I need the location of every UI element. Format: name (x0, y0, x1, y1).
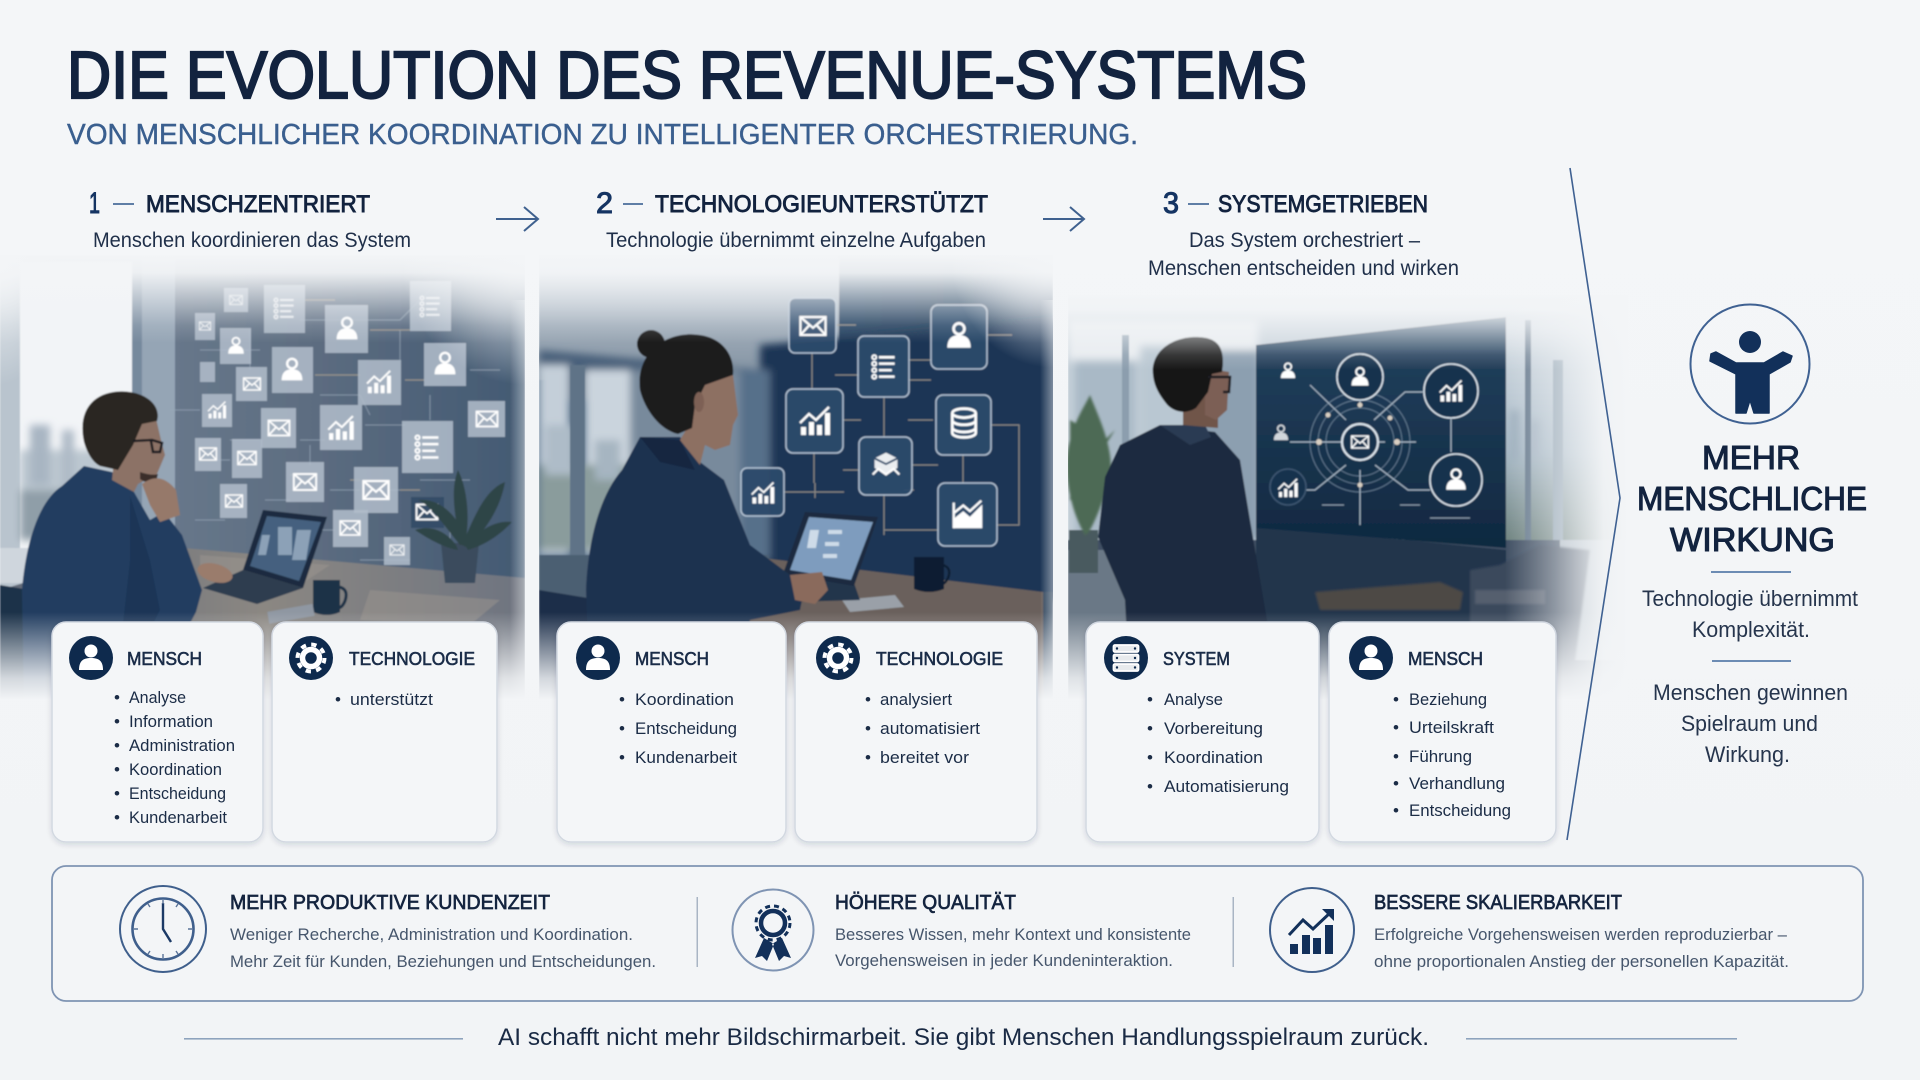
card: stage 2 Technologie: TECHNOLOGIE (876, 649, 1003, 669)
benefit: better scalability: Erfolgreiche Vorgehensweisen werden reproduzierbar – (1374, 925, 1788, 944)
card: stage 3 Mensch: Beziehung (1409, 690, 1487, 709)
panel: stage 1 heading: 1 (89, 187, 100, 220)
card: stage 1 Technologie: unterstützt (350, 690, 433, 709)
card: stage 1 Mensch: Kundenarbeit (129, 808, 227, 827)
card: stage 3 Mensch: • (1393, 718, 1399, 737)
benefit: productive customer time (120, 886, 656, 972)
panel: outcome: Komplexität. (1692, 617, 1810, 642)
panel: outcome: Wirkung. (1705, 742, 1790, 767)
card: stage 2 Technologie: automatisiert (880, 719, 980, 738)
card: stage 3 Mensch: Urteilskraft (1409, 718, 1494, 737)
card: stage 1 Mensch (52, 622, 263, 842)
photo: person coordinating floating task tiles (0, 272, 525, 694)
card: stage 3 System: • (1147, 690, 1153, 709)
benefit: higher quality (732, 890, 1191, 970)
card: stage 1 Mensch: Analyse (129, 688, 186, 707)
card: stage 1 Mensch: • (114, 688, 120, 707)
panel: stage 1 heading (89, 187, 411, 252)
plant (441, 543, 479, 583)
panel: stage 2 heading: Technologie übernimmt einzelne Aufgaben (606, 229, 986, 252)
card: stage 3 Mensch (1329, 622, 1556, 842)
laptop (203, 570, 303, 604)
card: stage 3 System: • (1147, 719, 1153, 738)
icon: clock (120, 886, 206, 972)
laptop (818, 580, 860, 602)
panel: stage 3 heading: Das System orchestriert – (1189, 229, 1420, 252)
card: stage 2 Mensch: Kundenarbeit (635, 748, 737, 767)
card: stage 3 System: Vorbereitung (1164, 719, 1263, 738)
photo: person looking at orchestration wall display (1068, 316, 1602, 694)
panel: stage 1 heading: Menschen koordinieren das System (93, 229, 411, 252)
card: stage 3 System: • (1147, 748, 1153, 767)
card: stage 2 Mensch: Koordination (635, 690, 734, 709)
card: stage 2 Technologie: • (865, 748, 871, 767)
panel: outcome: MEHR (1702, 439, 1800, 476)
panel: benefits (52, 866, 1863, 1001)
panel: outcome: MENSCHLICHE (1637, 480, 1867, 517)
card: stage 2 Technologie (795, 622, 1037, 842)
card: stage 1 Mensch: • (114, 712, 120, 731)
arrow: stage 2 to 3 (1043, 207, 1084, 231)
panel: outcome: Menschen gewinnen (1653, 680, 1848, 705)
panel: stage 3 heading: SYSTEMGETRIEBEN (1218, 191, 1428, 218)
benefit: productive customer time: MEHR PRODUKTIVE KUNDENZEIT (230, 892, 550, 914)
card: stage 1 Mensch: Entscheidung (129, 784, 226, 803)
arrow: stage 1 to 2 (496, 207, 538, 231)
card: stage 1 Mensch: • (114, 808, 120, 827)
floating tiles (195, 281, 505, 565)
wall display (1256, 317, 1506, 548)
card: stage 2 Technologie: • (865, 719, 871, 738)
mug (313, 580, 340, 615)
card: stage 2 Mensch: • (619, 690, 625, 709)
panel: outcome: Spielraum und (1681, 711, 1818, 736)
panel: stage 2 heading: 2 (596, 187, 613, 220)
icon: person with open arms (1690, 304, 1810, 424)
card: stage 1 Mensch: MENSCH (127, 649, 202, 669)
person (586, 436, 802, 622)
card: stage 3 Mensch: • (1393, 747, 1399, 766)
card: stage 2 Technologie: analysiert (880, 690, 952, 709)
panel: outcome: WIRKUNG (1670, 521, 1835, 558)
benefit: better scalability: BESSERE SKALIERBARKEIT (1374, 892, 1622, 914)
card: stage 2 Technologie: • (865, 690, 871, 709)
card: stage 3 System: Analyse (1164, 690, 1223, 709)
card: stage 3 Mensch: Entscheidung (1409, 801, 1511, 820)
card: stage 2 Mensch: • (619, 719, 625, 738)
card: stage 1 Mensch: Administration (129, 736, 235, 755)
card: stage 1 Mensch: Koordination (129, 760, 222, 779)
card: stage 2 Mensch: • (619, 748, 625, 767)
card: stage 3 Mensch: MENSCH (1408, 649, 1483, 669)
card: stage 2 Mensch: Entscheidung (635, 719, 737, 738)
card: stage 3 System: Automatisierung (1164, 777, 1289, 796)
subtitle: VON MENSCHLICHER KOORDINATION ZU INTELLIGENTER ORCHESTRIERUNG. (67, 119, 1138, 151)
benefit: higher quality: Besseres Wissen, mehr Kontext und konsistente (835, 925, 1191, 944)
card: stage 3 System: • (1147, 777, 1153, 796)
benefit: better scalability (1270, 888, 1789, 972)
card: stage 3 Mensch: • (1393, 774, 1399, 793)
card: stage 3 System: Koordination (1164, 748, 1263, 767)
desk (749, 558, 1044, 684)
card: stage 1 Mensch: Information (129, 712, 213, 731)
card: stage 3 Mensch: Führung (1409, 747, 1472, 766)
benefit: productive customer time: Weniger Recherche, Administration und Koordination. (230, 925, 633, 944)
card: stage 1 Technologie: TECHNOLOGIE (349, 649, 475, 669)
panel: stage 3 heading: Menschen entscheiden und wirken (1148, 257, 1459, 280)
card: stage 1 Mensch: • (114, 760, 120, 779)
benefit: productive customer time: Mehr Zeit für Kunden, Beziehungen und Entscheidungen. (230, 952, 656, 971)
benefit: higher quality: Vorgehensweisen in jeder Kundeninteraktion. (835, 951, 1173, 970)
card: stage 1 Mensch: • (114, 736, 120, 755)
icon: growth chart (1270, 888, 1354, 972)
panel: outcome: Technologie übernimmt (1642, 586, 1858, 611)
person (1097, 424, 1266, 622)
benefit: higher quality: HÖHERE QUALITÄT (835, 892, 1016, 914)
footer statement: AI schafft nicht mehr Bildschirmarbeit. Sie gibt Menschen Handlungsspielraum zurück. (498, 1024, 1429, 1051)
card: stage 3 Mensch: • (1393, 801, 1399, 820)
plant (1069, 530, 1098, 573)
panel: stage 3 heading (1148, 187, 1459, 280)
holographic tiles (741, 298, 997, 546)
desk (10, 548, 525, 676)
photo: person working with technology tiles (539, 268, 1053, 694)
panel: stage 1 heading: MENSCHZENTRIERT (146, 191, 370, 218)
icon: award rosette (732, 890, 814, 970)
card: stage 1 Technologie: • (335, 690, 341, 709)
card: stage 1 Technologie (272, 622, 497, 842)
panel: stage 2 heading (596, 187, 988, 252)
chevron divider (1567, 168, 1620, 840)
benefit: better scalability: ohne proportionalen Anstieg der personellen Kapazität. (1374, 952, 1789, 971)
card: stage 2 Mensch: MENSCH (635, 649, 709, 669)
card: stage 3 Mensch: Verhandlung (1409, 774, 1505, 793)
floor and furniture (1068, 538, 1591, 674)
card: stage 3 System (1086, 622, 1319, 842)
card: stage 2 Mensch (557, 622, 786, 842)
card: stage 3 System: SYSTEM (1163, 649, 1230, 669)
panel: stage 3 heading: 3 (1163, 187, 1179, 220)
card: stage 2 Technologie: bereitet vor (880, 748, 969, 767)
panel: stage 2 heading: TECHNOLOGIEUNTERSTÜTZT (655, 191, 988, 218)
card: stage 1 Mensch: • (114, 784, 120, 803)
card: stage 3 Mensch: • (1393, 690, 1399, 709)
panel: outcome (1637, 304, 1867, 767)
title: DIE EVOLUTION DES REVENUE-SYSTEMS (67, 38, 1307, 113)
person (22, 465, 202, 662)
